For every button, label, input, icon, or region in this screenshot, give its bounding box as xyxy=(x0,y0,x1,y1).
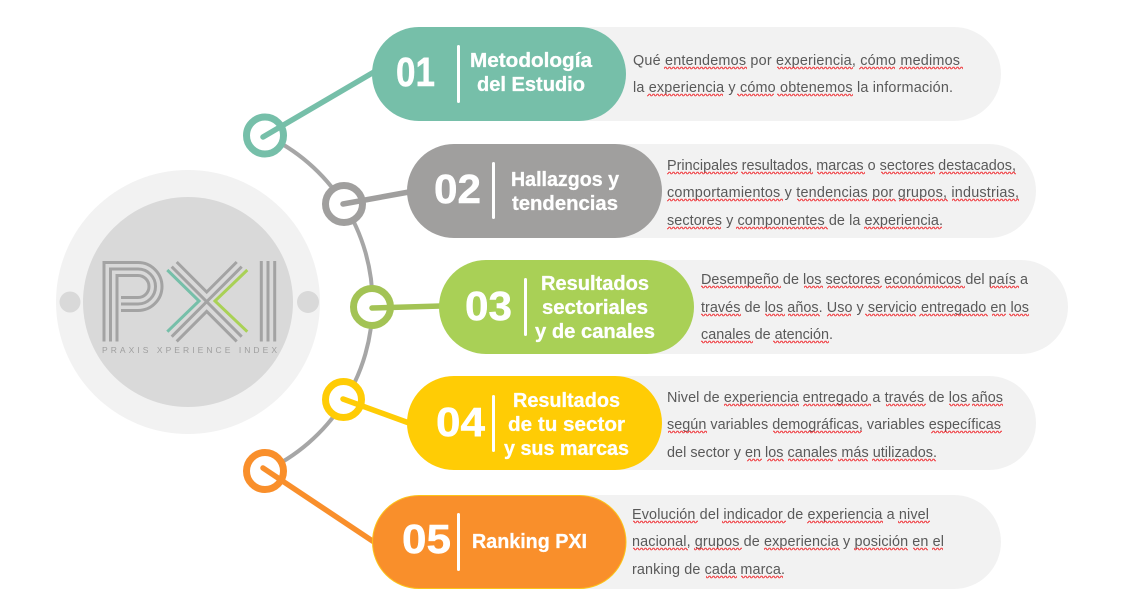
heading 03: sectoriales xyxy=(542,297,648,319)
PXI logo mark xyxy=(104,261,275,342)
connector 05 xyxy=(246,452,374,542)
description 05: ranking de cada marca. xyxy=(632,562,785,578)
panel: 04 Resultados de tu sector y sus marcas xyxy=(326,376,1036,470)
number 05: 05 xyxy=(402,516,451,562)
description 01: la experiencia y cómo obtenemos la información. xyxy=(633,80,953,96)
connecting arc xyxy=(265,135,373,471)
description 01: Qué entendemos por experiencia, cómo medimos xyxy=(633,53,960,69)
heading 01 xyxy=(470,50,593,96)
heading 02: tendencias xyxy=(512,193,618,215)
number 03: 03 xyxy=(465,283,512,329)
connector 02 xyxy=(326,186,409,222)
heading 02 xyxy=(511,169,620,215)
heading 03: y de canales xyxy=(535,321,655,343)
connector 01 xyxy=(246,72,374,154)
heading 01: del Estudio xyxy=(477,74,585,96)
description 03: canales de atención. xyxy=(701,327,833,343)
logo caption: PRAXIS XPERIENCE INDEX xyxy=(102,345,277,355)
connector 04 xyxy=(326,382,409,423)
description 04 xyxy=(667,390,1003,462)
panel: 03 Resultados sectoriales y de canales xyxy=(354,260,1068,354)
panel: 05 Ranking PXI xyxy=(246,452,1001,589)
heading 03: Resultados xyxy=(541,273,649,295)
description 01 xyxy=(633,53,963,96)
description 02 xyxy=(667,158,1019,230)
description 03: través de los años. Uso y servicio entregado en los xyxy=(701,300,1029,316)
description 05: nacional, grupos de experiencia y posición en el xyxy=(632,534,944,550)
heading 04 xyxy=(504,390,629,460)
panel: 02 Hallazgos y tendencias xyxy=(326,144,1036,238)
logo badge xyxy=(56,170,320,434)
description 05 xyxy=(632,507,944,578)
description 04: según variables demográficas, variables específicas xyxy=(667,417,1001,433)
heading 04: de tu sector xyxy=(508,414,625,436)
description 03 xyxy=(701,272,1029,344)
description 04: del sector y en los canales más utilizados. xyxy=(667,445,937,461)
panel: 01 Metodología del Estudio xyxy=(246,27,1001,154)
heading 04: Resultados xyxy=(513,390,620,412)
heading 01: Metodología xyxy=(470,50,593,72)
number 01: 01 xyxy=(396,49,435,95)
description 05: Evolución del indicador de experiencia a nivel xyxy=(632,507,929,523)
description 02: Principales resultados, marcas o sectores destacados, xyxy=(667,158,1016,174)
heading 03 xyxy=(535,273,655,343)
heading 05: Ranking PXI xyxy=(472,531,587,553)
number 04: 04 xyxy=(436,399,485,445)
description 04: Nivel de experiencia entregado a través de los años xyxy=(667,390,1003,406)
description 03: Desempeño de los sectores económicos del país a xyxy=(701,272,1028,288)
heading 02: Hallazgos y xyxy=(511,169,620,191)
heading 04: y sus marcas xyxy=(504,438,629,460)
number 02: 02 xyxy=(434,166,481,212)
description 02: sectores y componentes de la experiencia. xyxy=(667,213,943,229)
description 02: comportamientos y tendencias por grupos, industrias, xyxy=(667,185,1019,201)
connector 03 xyxy=(354,288,441,326)
